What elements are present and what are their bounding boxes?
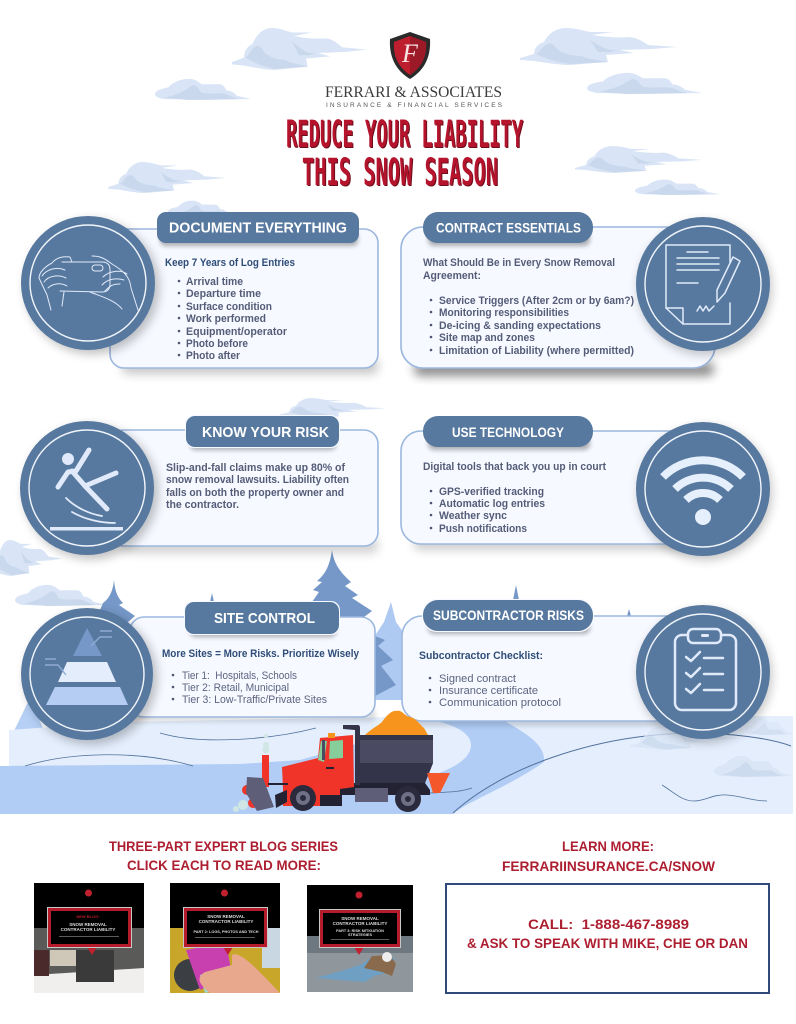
heading pill: SITE CONTROL — [214, 610, 315, 627]
spreader — [427, 773, 450, 793]
thumbnail: blog part 1 — [34, 883, 144, 993]
wheels — [290, 785, 421, 812]
digital tools list: Weather sync — [439, 510, 507, 522]
panel: site control — [21, 601, 376, 744]
heading pill: DOCUMENT EVERYTHING — [169, 220, 347, 236]
icon: hands holding phone — [21, 216, 159, 354]
log entries list: Photo after — [186, 350, 241, 362]
checklist: Signed contract — [439, 673, 516, 685]
title: THIS SNOW SEASON — [303, 152, 499, 195]
thumbnail: blog part 2: CONTRACTOR LIABILITY — [199, 919, 253, 924]
exhaust stack — [343, 725, 360, 785]
agreement list: What Should Be in Every Snow Removal — [423, 257, 615, 269]
thumbnail: blog part 3 — [307, 885, 413, 992]
panel: contract essentials — [401, 212, 772, 376]
title: THIS SNOW SEASON — [302, 151, 498, 194]
log entries list: Surface condition — [186, 301, 272, 313]
checklist: Subcontractor Checklist: — [419, 650, 543, 662]
agreement list: Monitoring responsibilities — [439, 307, 569, 319]
icon: shield: F — [401, 39, 419, 68]
digital tools list: Push notifications — [439, 523, 527, 535]
digital tools list: GPS-verified tracking — [439, 486, 544, 498]
checklist: Communication protocol — [439, 697, 561, 709]
snow spray — [233, 734, 270, 812]
callout: call box — [446, 884, 769, 993]
agreement list: Agreement: — [423, 270, 481, 282]
risk description: Slip-and-fall claims make up 80% of — [166, 462, 345, 474]
logo: Ferrari & Associates — [325, 32, 503, 109]
log entries list: Departure time — [186, 288, 261, 300]
thumbnail: blog part 2 — [170, 883, 280, 993]
title: REDUCE YOUR LIABILITY — [286, 113, 523, 156]
dump body — [360, 735, 433, 783]
thumbnail: blog part 3: PART 3: RISK MITIGATION — [336, 929, 384, 933]
agreement list: Service Triggers (After 2cm or by 6am?) — [439, 295, 634, 307]
heading pill — [184, 601, 340, 637]
agreement list: Site map and zones — [439, 332, 535, 344]
checklist — [419, 650, 561, 709]
icon: wifi — [636, 422, 772, 560]
thumbnail: blog part 3: CONTRACTOR LIABILITY — [333, 921, 387, 926]
agreement list: Limitation of Liability (where permitted) — [439, 345, 634, 357]
risk description: the contractor. — [166, 499, 239, 511]
log entries list: Arrival time — [186, 276, 243, 288]
heading pill — [422, 599, 594, 634]
panel: use technology — [401, 416, 772, 560]
heading: blog series: CLICK EACH TO READ MORE: — [127, 857, 321, 873]
thumbnail: blog part 3: STRATEGIES — [348, 933, 372, 937]
plow arm — [262, 755, 269, 787]
callout: call box: & ASK TO SPEAK WITH MIKE, CHE OR DAN — [467, 935, 748, 951]
checklist: Insurance certificate — [439, 685, 538, 697]
tier list — [162, 648, 360, 706]
pine trees behind the panels — [12, 550, 631, 735]
icon: clipboard — [636, 605, 772, 743]
heading pill — [157, 212, 359, 246]
thumbnail: blog part 1: CONTRACTOR LIABILITY — [61, 927, 115, 932]
gravel load — [365, 711, 428, 735]
thumbnail: blog part 2: SNOW REMOVAL — [207, 914, 245, 919]
panel: know your risk — [20, 415, 378, 559]
log entries list: Keep 7 Years of Log Entries — [165, 257, 295, 269]
log entries list — [165, 257, 295, 362]
risk description — [166, 462, 349, 511]
title — [286, 113, 524, 195]
tier list: More Sites = More Risks. Prioritize Wisely — [162, 648, 360, 660]
plow blade — [242, 785, 252, 795]
heading pill: KNOW YOUR RISK — [202, 424, 329, 441]
digital tools list: Automatic log entries — [439, 498, 545, 510]
icon: risk pyramid — [21, 608, 157, 744]
heading pill: USE TECHNOLOGY — [452, 425, 564, 440]
tier list: Tier 2: Retail, Municipal — [182, 682, 289, 694]
cab — [282, 735, 354, 806]
log entries list: Work performed — [186, 313, 266, 325]
agreement list — [423, 257, 634, 357]
clouds in the sky — [0, 28, 720, 606]
company tagline: INSURANCE & FINANCIAL SERVICES — [326, 102, 503, 109]
risk description: falls on both the property owner and — [166, 487, 344, 499]
thumbnail: blog part 3: SNOW REMOVAL — [341, 916, 379, 921]
thumbnail: blog part 1: NEW BLOG: — [76, 914, 100, 919]
heading pill: SUBCONTRACTOR RISKS — [433, 608, 584, 623]
heading pill — [423, 416, 593, 450]
snowy landscape — [0, 716, 793, 814]
title: REDUCE YOUR LIABILITY — [287, 114, 524, 157]
icon: shield — [390, 32, 430, 79]
chassis — [283, 783, 430, 795]
heading: blog series — [109, 838, 338, 873]
heading pill — [185, 415, 340, 450]
heading: blog series: THREE-PART EXPERT BLOG SERIES — [109, 838, 338, 854]
learn more link: FERRARIINSURANCE.CA/SNOW — [502, 858, 716, 874]
risk description: snow removal lawsuits. Liability often — [166, 474, 349, 486]
icon: contract and pen — [636, 217, 772, 355]
digital tools list — [423, 461, 606, 535]
log entries list: Equipment/operator — [186, 326, 288, 338]
callout: call box: CALL: 1-888-467-8989 — [528, 916, 689, 932]
heading pill — [423, 212, 593, 246]
learn more link: LEARN MORE: — [562, 838, 654, 854]
agreement list: De-icing & sanding expectations — [439, 320, 601, 332]
log entries list: Photo before — [186, 338, 248, 350]
tier list: Tier 3: Low-Traffic/Private Sites — [182, 694, 327, 706]
company name: FERRARI & ASSOCIATES — [325, 84, 502, 101]
panel: subcontractor risks — [402, 599, 772, 743]
heading pill: CONTRACT ESSENTIALS — [436, 220, 581, 236]
thumbnail: blog part 2: PART 2: LOGS, PHOTOS AND TECH — [194, 930, 259, 934]
thumbnail: blog part 1: SNOW REMOVAL — [69, 922, 107, 927]
tier list: Tier 1: Hospitals, Schools — [182, 670, 297, 682]
illustration: snow plow truck — [233, 711, 450, 812]
panel: document everything — [21, 212, 378, 374]
icon: slip and fall — [20, 421, 158, 559]
learn more link — [502, 838, 716, 874]
fuel tank — [355, 788, 388, 802]
digital tools list: Digital tools that back you up in court — [423, 461, 606, 473]
